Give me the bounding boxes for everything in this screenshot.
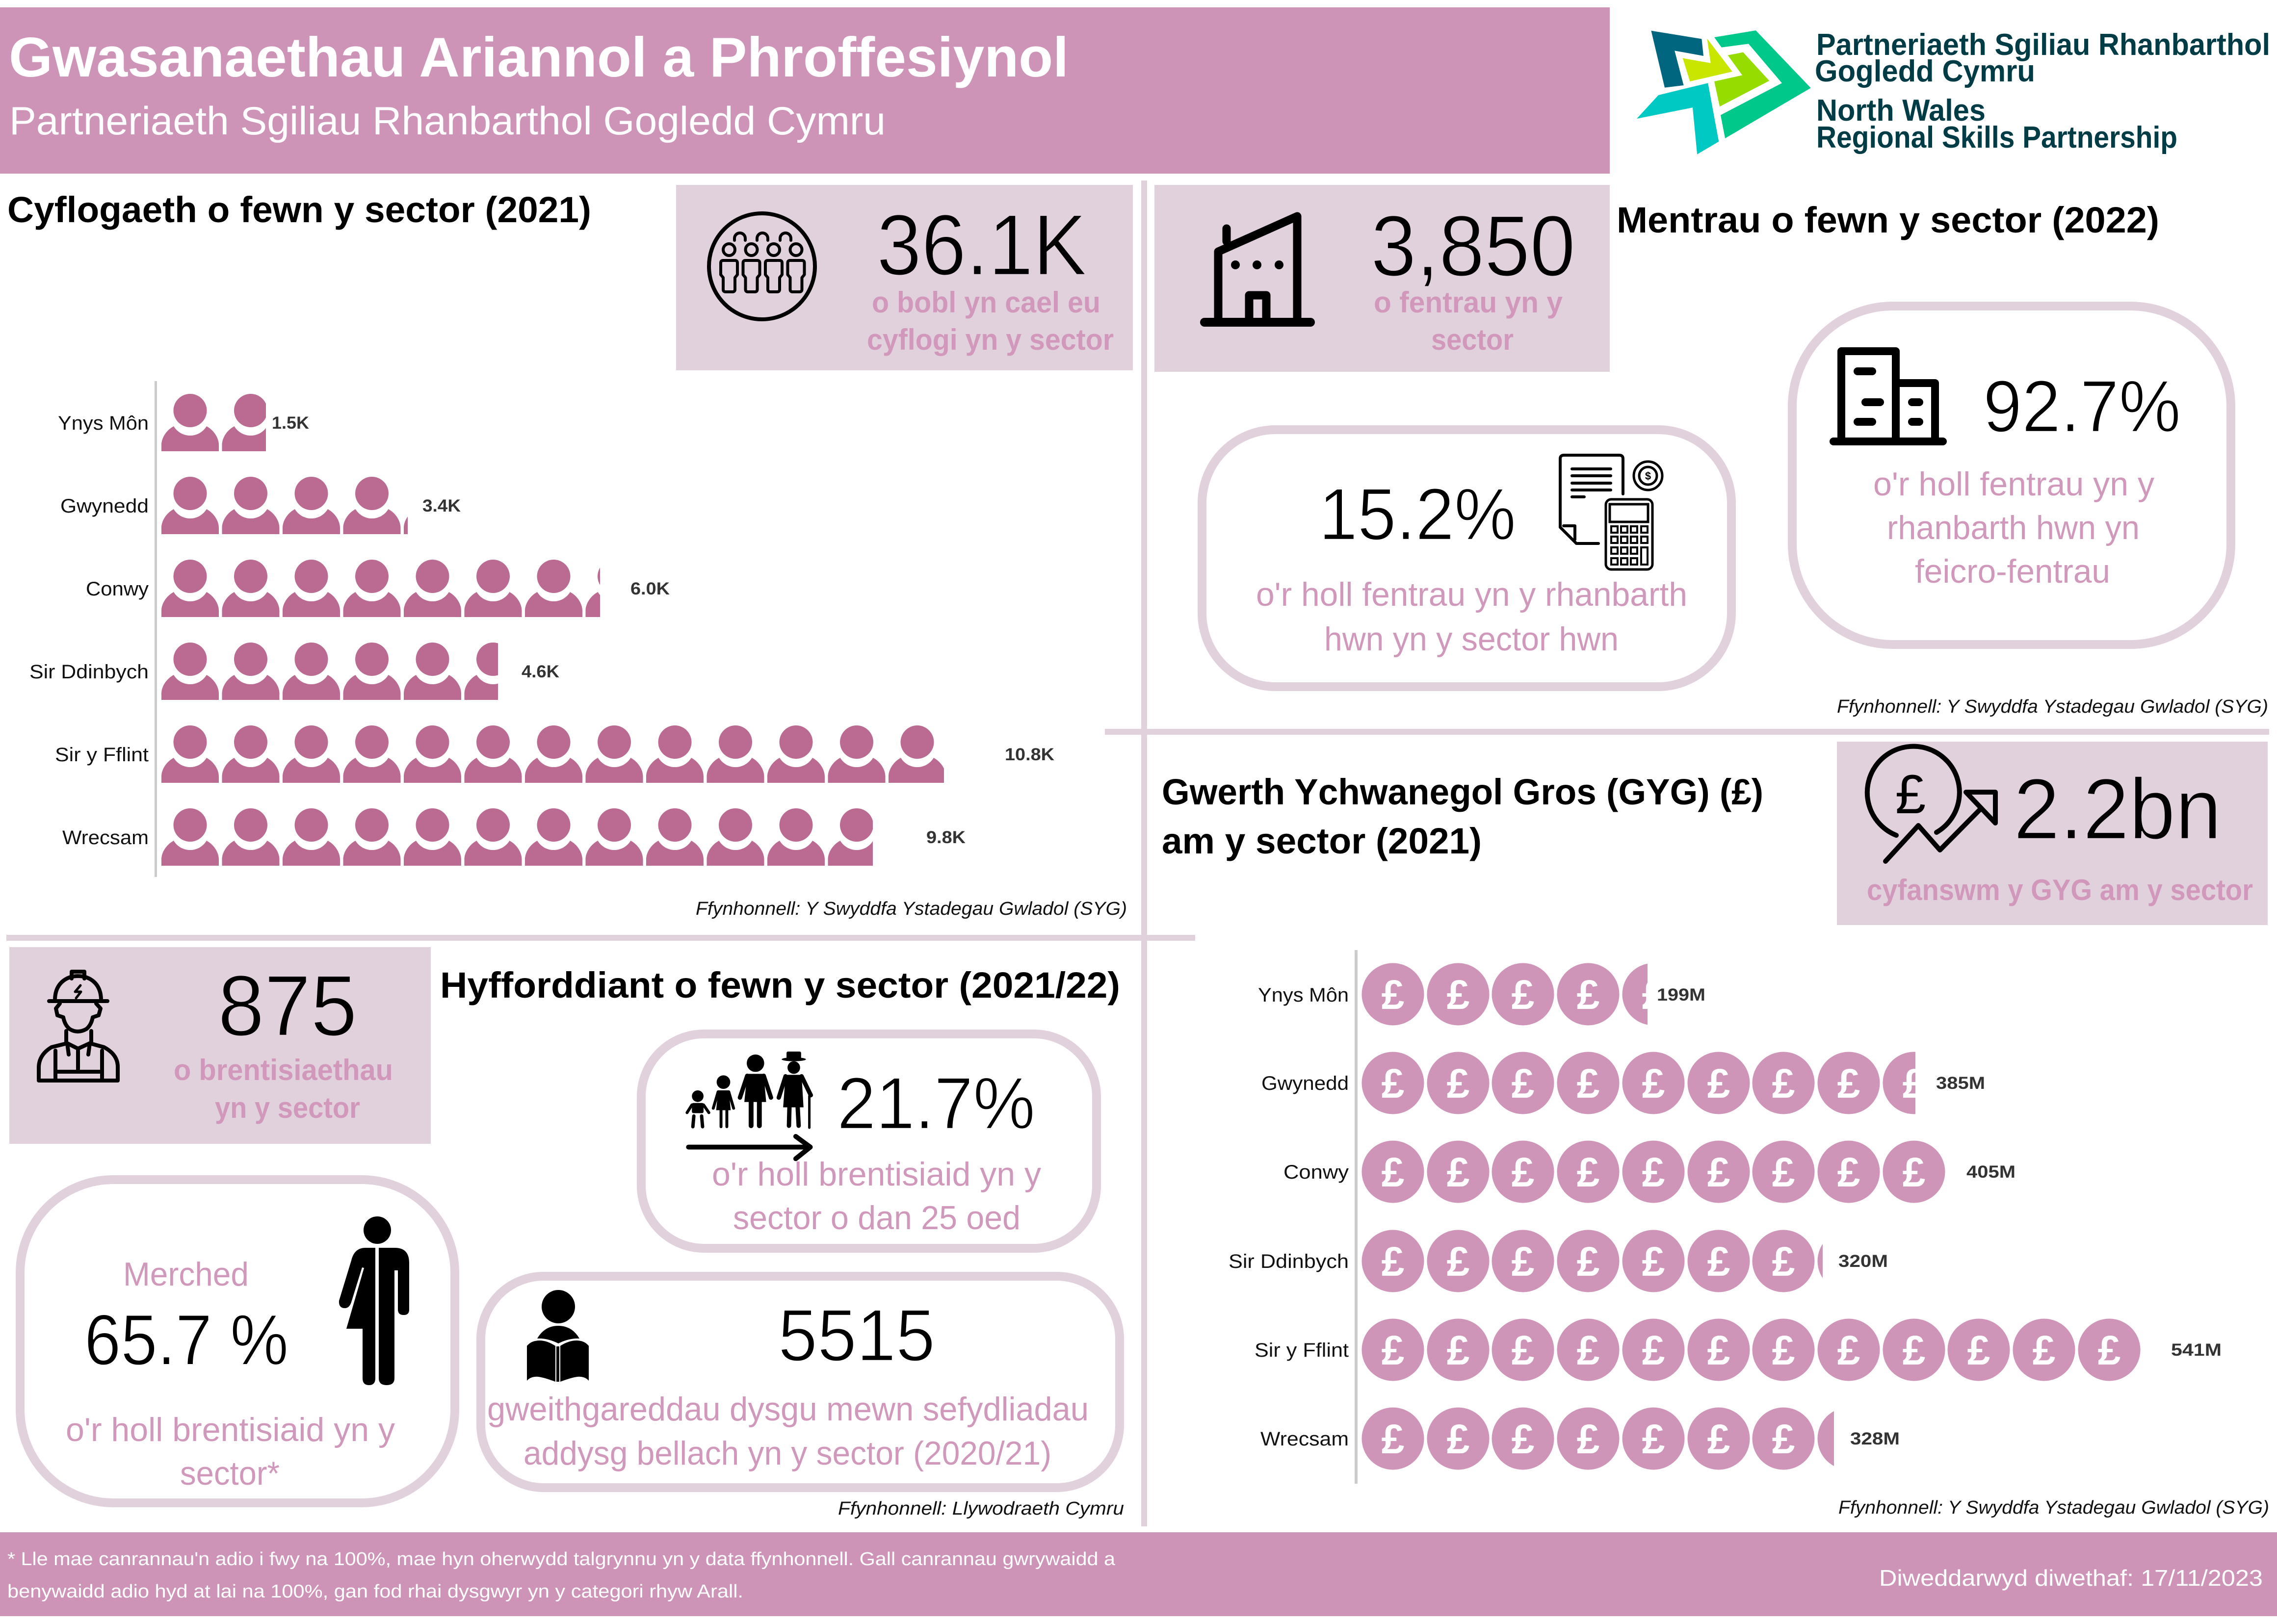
logo: North Wales Regional Skills Partnership: North Wales <box>1816 94 1986 128</box>
row: Gwynedd <box>1261 1052 1985 1114</box>
text: total GVA: cyfanswm y GYG am y sector <box>1867 874 2253 906</box>
text: enterprises in sector <box>1374 286 1563 356</box>
row: Gwynedd: £££££££££ <box>1382 1060 1925 1107</box>
row: Ynys Môn: 1.5K <box>272 413 309 433</box>
row: Gwynedd: 3.4K <box>422 496 461 516</box>
row: Wrecsam: 328M <box>1850 1429 1900 1448</box>
panel: enterprises KPI <box>1154 185 1610 372</box>
text: description: gweithgareddau dysgu mewn sefydliadau <box>487 1391 1089 1428</box>
row: Conwy: Conwy <box>86 578 149 600</box>
footer <box>0 1532 2277 1616</box>
text: apprenticeships in sector: o brentisiaethau <box>174 1054 393 1086</box>
text: enterprises in sector: o fentrau yn y <box>1374 286 1563 319</box>
row: Sir Ddinbych: Sir Ddinbych <box>1229 1251 1349 1272</box>
panel: under 25 apprentices <box>641 1034 1097 1248</box>
text: description: hwn yn y sector hwn <box>1324 620 1619 658</box>
row: Sir Ddinbych: Sir Ddinbych <box>29 661 149 683</box>
row: Ynys Môn: £££££ <box>1382 972 1665 1018</box>
row: Sir y Fflint <box>55 725 1054 783</box>
header banner <box>0 7 1610 174</box>
logo: North Wales Regional Skills Partnership <box>1637 28 2270 155</box>
logo: North Wales Regional Skills Partnership: Gogledd Cymru <box>1815 54 2035 88</box>
row: Conwy: 6.0K <box>630 579 670 598</box>
icon: person reading a book <box>527 1290 589 1382</box>
heading: GVA: am y sector (2021) <box>1162 821 1482 861</box>
panel: 15.2% enterprises in this sector <box>1202 430 1731 687</box>
text: description <box>712 1156 1041 1237</box>
text: apprenticeships in sector: yn y sector <box>215 1091 360 1124</box>
row: Ynys Môn: 199M <box>1657 985 1705 1005</box>
text: description <box>66 1411 395 1492</box>
row: Sir Ddinbych <box>1229 1230 1888 1292</box>
text: Merched: Merched <box>123 1256 249 1293</box>
row: Sir Ddinbych: 4.6K <box>522 662 559 681</box>
text: description: feicro-fentrau <box>1915 553 2110 590</box>
text: description <box>1873 465 2154 590</box>
text: description: o'r holl fentrau yn y rhanbarth <box>1256 576 1687 613</box>
icon: age progression figures with arrow <box>687 1052 811 1159</box>
heading: enterprises: Mentrau o fewn y sector (2022) <box>1617 200 2159 240</box>
number: 36.1K: 36.1K <box>877 197 1087 293</box>
panel: employment KPI <box>676 185 1133 370</box>
row: Sir Ddinbych: 320M <box>1838 1252 1888 1271</box>
text: people employed <box>867 286 1114 356</box>
text: description: o'r holl fentrau yn y <box>1873 465 2154 503</box>
text: people employed: cyflogi yn y sector <box>867 323 1114 356</box>
heading: GVA: Gwerth Ychwanegol Gros (GYG) (£) <box>1162 772 1763 812</box>
panel: 92.7% micro-enterprises <box>1792 306 2231 644</box>
panel: women apprentices <box>20 1180 455 1503</box>
text: description <box>1256 576 1687 658</box>
pictogram chart: employment by county <box>29 381 1054 877</box>
text: description: rhanbarth hwn yn <box>1887 509 2140 546</box>
panel: further education learning activities <box>481 1276 1120 1488</box>
row: Gwynedd: Gwynedd <box>1261 1073 1349 1094</box>
row: Sir Ddinbych: ££££££££ <box>1382 1238 1860 1285</box>
number: 92.7%: 92.7% <box>1983 365 2181 447</box>
icon: construction worker <box>39 972 118 1081</box>
row: Sir Ddinbych <box>29 643 559 700</box>
pictogram chart: GVA by county <box>1229 950 2222 1484</box>
number: 3,850: 3,850 <box>1371 198 1575 294</box>
row: Sir y Fflint <box>1255 1318 2222 1381</box>
number: 21.7%: 21.7% <box>837 1062 1035 1144</box>
row: Ynys Môn: Ynys Môn <box>58 412 149 434</box>
row: Gwynedd <box>60 477 461 534</box>
icon: building <box>1200 216 1315 327</box>
row: Wrecsam: Wrecsam <box>62 827 149 849</box>
icon: split woman and man figure <box>339 1216 409 1385</box>
text: apprenticeships in sector <box>174 1054 393 1124</box>
icon: people in circle <box>709 213 815 319</box>
icon: document and calculator <box>1560 455 1662 569</box>
row: Conwy: Conwy <box>1283 1161 1349 1183</box>
icon: pound growth arrow <box>1867 747 1995 861</box>
row: Ynys Môn <box>58 394 309 451</box>
number: 5515: 5515 <box>778 1294 935 1376</box>
source: training: Ffynhonnell: Llywodraeth Cymru <box>838 1498 1124 1519</box>
icon: pound growth arrow: £ <box>1895 764 1926 825</box>
footnote: * Lle mae canrannau'n adio i fwy na 100%, mae hyn oherwydd talgrynnu yn y data ffynhonnell. Gall canrannau gwrywaidd a <box>7 1549 1116 1570</box>
icon: city buildings <box>1830 351 1947 445</box>
number: 2.2bn: 2.2bn <box>2014 761 2222 857</box>
row: Gwynedd: Gwynedd <box>60 495 149 517</box>
row: Sir y Fflint: Sir y Fflint <box>55 744 149 766</box>
footnote <box>7 1549 1116 1602</box>
heading: employment: Cyflogaeth o fewn y sector (2021) <box>7 189 591 230</box>
text: description: o'r holl brentisiaid yn y <box>712 1156 1041 1193</box>
row: Sir y Fflint: Sir y Fflint <box>1255 1340 1349 1361</box>
source: employment: Ffynhonnell: Y Swyddfa Ystadegau Gwladol (SYG) <box>696 899 1127 919</box>
logo: North Wales Regional Skills Partnership: Regional Skills Partnership <box>1816 121 2177 155</box>
panel: apprenticeships KPI <box>9 947 431 1144</box>
panel: GVA KPI <box>1837 742 2268 925</box>
subtitle: Partneriaeth Sgiliau Rhanbarthol Gogledd Cymru <box>9 99 886 143</box>
icon: document and calculator: $ <box>1645 470 1651 482</box>
row: Conwy: £££££££££ <box>1382 1149 1925 1195</box>
row: Wrecsam: Wrecsam <box>1260 1428 1349 1450</box>
source: GVA: Ffynhonnell: Y Swyddfa Ystadegau Gwladol (SYG) <box>1838 1497 2269 1518</box>
source: enterprises: Ffynhonnell: Y Swyddfa Ystadegau Gwladol (SYG) <box>1837 696 2268 717</box>
text: description: sector* <box>180 1455 280 1492</box>
row: Wrecsam: ££££££££ <box>1382 1416 1860 1462</box>
text: people employed: o bobl yn cael eu <box>872 286 1100 319</box>
row: Conwy <box>1283 1141 2015 1203</box>
heading: training: Hyfforddiant o fewn y sector (2021/22) <box>440 965 1120 1005</box>
row: Ynys Môn <box>1258 963 1705 1025</box>
number: 15.2%: 15.2% <box>1319 473 1516 555</box>
number: 65.7 %: 65.7 % <box>84 1300 288 1380</box>
text: description <box>487 1391 1089 1472</box>
text: description: sector o dan 25 oed <box>733 1199 1021 1237</box>
row: Conwy <box>86 560 670 617</box>
row: Wrecsam <box>1260 1408 1900 1469</box>
number: 875: 875 <box>218 958 357 1054</box>
text: description: o'r holl brentisiaid yn y <box>66 1411 395 1448</box>
text: description: addysg bellach yn y sector (2020/21) <box>523 1435 1051 1472</box>
row: Conwy: 405M <box>1966 1162 2015 1182</box>
row: Wrecsam: 9.8K <box>926 828 966 847</box>
row: Wrecsam <box>62 808 966 866</box>
row: Sir y Fflint: 10.8K <box>1005 745 1054 764</box>
row: Ynys Môn: Ynys Môn <box>1258 984 1349 1006</box>
row: Sir y Fflint: 541M <box>2171 1340 2222 1360</box>
row: Gwynedd: 385M <box>1936 1074 1985 1093</box>
text: enterprises in sector: sector <box>1431 323 1514 356</box>
last updated: Diweddarwyd diwethaf: 17/11/2023 <box>1879 1565 2263 1591</box>
logo: North Wales Regional Skills Partnership: Partneriaeth Sgiliau Rhanbarthol <box>1816 28 2270 62</box>
title: Gwasanaethau Ariannol a Phroffesiynol <box>9 26 1069 89</box>
heading: GVA <box>1162 772 1763 861</box>
row: Sir y Fflint: ££££££££££££ <box>1382 1327 2120 1373</box>
footnote: benywaidd adio hyd at lai na 100%, gan fod rhai dysgwyr yn y categori rhyw Arall. <box>7 1581 743 1602</box>
